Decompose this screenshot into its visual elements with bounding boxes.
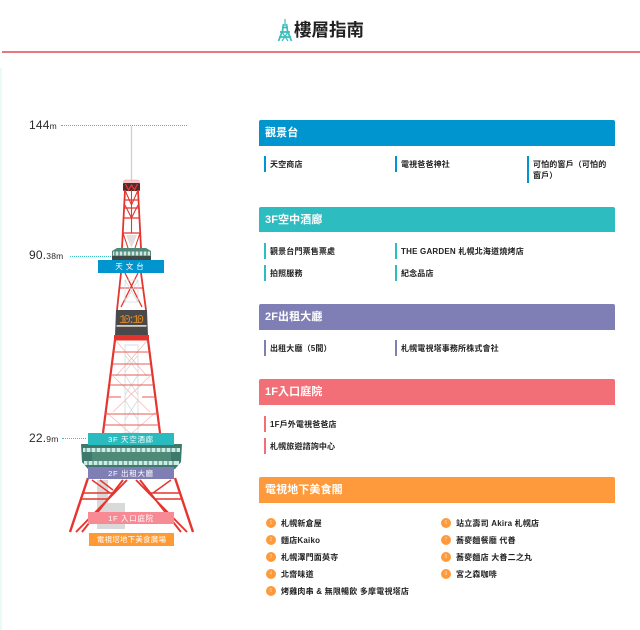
panel: basement food hall: 7 (444, 537, 447, 543)
heading: observatory (259, 120, 615, 146)
item 6: 站立壽司 Akira 札幌店 (456, 519, 539, 528)
panel: basement food hall: 8 (444, 554, 447, 560)
item: ticket office: 觀景台門票售票處 (270, 247, 335, 256)
item 7: 蕎麥麵餐廳 代善 (456, 536, 516, 545)
floor label: 3F (88, 433, 174, 445)
item: photo service (264, 265, 303, 281)
floor label: observatory (98, 260, 164, 273)
top cabin (123, 180, 140, 191)
item: office (395, 340, 499, 356)
floor label: 1F: 1F 入口庭院 (108, 514, 154, 523)
floor label: 3F: 3F 天空酒廊 (108, 435, 154, 444)
item: rental hall (264, 340, 332, 356)
panel: observatory (259, 120, 615, 183)
height line: 22.9m (62, 438, 86, 439)
item 8: 蕎麥麵店 大善二之丸 (456, 553, 532, 562)
item: the garden: THE GARDEN 札幌北海道燒烤店 (401, 247, 524, 256)
left edge tint (0, 68, 2, 630)
title (278, 19, 364, 42)
panel: basement food hall: 6 (444, 520, 447, 526)
item: rental hall: 出租大廳（5間） (270, 344, 332, 353)
item 1 (266, 518, 322, 528)
title text: 樓層指南 (294, 20, 364, 40)
floor label: observatory: 天文台 (115, 262, 147, 271)
heading: 1F (259, 379, 615, 405)
height line: 90.38m (70, 256, 111, 257)
item: souvenir shop (395, 265, 434, 281)
tower illustration (68, 126, 194, 533)
item: scary window: 可怕的窗戶（可怕的窗戶） (533, 160, 606, 180)
panel: 1F entrance (259, 379, 615, 454)
item: shrine: 電視爸爸神社 (401, 160, 450, 169)
upper mast lattice (122, 190, 141, 248)
panel: basement food hall: 4 (270, 571, 272, 577)
item 9 (441, 569, 497, 579)
heading: food hall: 電視地下美食閣 (265, 484, 343, 496)
lower tower lattice (103, 340, 160, 433)
floor label: 2F: 2F 出租大廳 (108, 469, 154, 478)
panel: basement food hall: 5 (270, 588, 272, 594)
floor label: basement (89, 533, 174, 546)
floor label: basement: 電視塔地下美食廣場 (97, 535, 166, 544)
panel: 2F rental hall (259, 304, 615, 356)
heading: food hall (259, 477, 615, 503)
main deck (81, 444, 182, 469)
middle lattice (117, 273, 146, 310)
heading: 2F: 2F出租大廳 (265, 311, 322, 323)
item 4 (266, 569, 314, 579)
panel: basement food hall (259, 477, 615, 596)
item: photo service: 拍照服務 (270, 269, 303, 278)
item: info centre: 札幌旅遊諮詢中心 (270, 442, 335, 451)
tower legs (70, 478, 193, 532)
item 3: 札幌澤門面英寺 (281, 553, 338, 562)
item: sky shop (264, 156, 303, 172)
heading: 3F: 3F空中酒廊 (265, 214, 322, 226)
item: office: 札幌電視塔事務所株式會社 (401, 344, 499, 353)
item: souvenir shop: 紀念品店 (401, 269, 434, 278)
height label: 144m: 144m (29, 118, 57, 132)
panel: basement food hall: 3 (270, 554, 272, 560)
floor label: 2F (88, 467, 174, 479)
item: outdoor shop: 1F戶外電視爸爸店 (270, 420, 337, 429)
heading: 3F (259, 207, 615, 232)
icon: tower (278, 19, 292, 42)
spire (130, 126, 132, 181)
base building (97, 480, 125, 529)
item 9: 宮之森咖啡 (456, 570, 497, 579)
clock panel (114, 310, 149, 340)
item: sky shop: 天空商店 (270, 160, 303, 169)
clock panel: 10:10 (119, 313, 144, 327)
height label: 90.38m: 90.38m (29, 248, 63, 262)
observation deck (112, 248, 151, 260)
height label: 22.9m: 22.9m (29, 431, 59, 445)
panel: basement food hall: 2 (270, 537, 272, 543)
item: scary window (527, 156, 611, 183)
item 4: 北齋味道 (281, 570, 314, 579)
panel: basement food hall: 9 (444, 571, 447, 577)
heading: 1F: 1F入口庭院 (265, 386, 322, 398)
item: shrine (395, 156, 450, 172)
item 5: 烤雞肉串 & 無限暢飲 多摩電視塔店 (281, 587, 409, 596)
item 2 (266, 535, 320, 545)
item: info centre (264, 438, 335, 454)
divider (2, 51, 640, 53)
heading: 2F (259, 304, 615, 330)
height line: 144m (61, 125, 187, 126)
item: outdoor shop (264, 416, 337, 432)
item 1: 札幌新倉屋 (281, 519, 322, 528)
panel: 3F sky lounge (259, 207, 615, 281)
item: ticket office (264, 243, 335, 259)
item: the garden (395, 243, 524, 259)
item 2: 麵店Kaiko (281, 536, 320, 545)
floor label: 1F (88, 512, 174, 524)
panel: basement food hall: 1 (270, 520, 272, 526)
heading: observatory: 觀景台 (265, 127, 298, 139)
